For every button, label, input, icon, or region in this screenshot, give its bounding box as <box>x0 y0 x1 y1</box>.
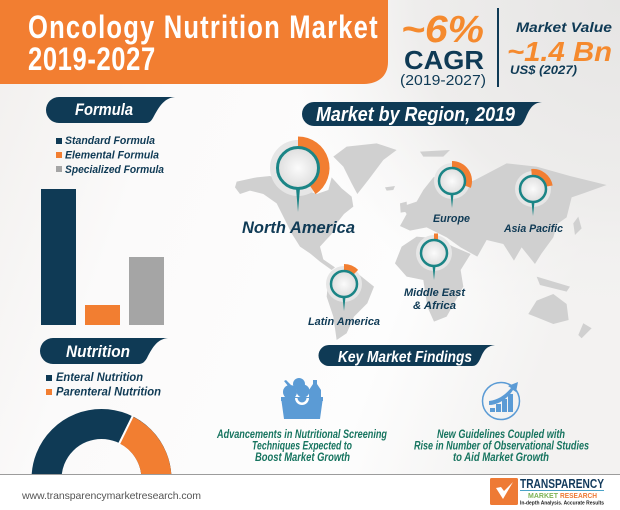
CAGR stat: CAGR <box>404 45 484 75</box>
label: latin america: Latin America <box>308 316 380 328</box>
bar chart <box>41 189 164 325</box>
label: middle east and africa: Middle East <box>404 287 466 299</box>
donut chart <box>32 409 172 474</box>
pin: north america <box>270 140 326 212</box>
heading: nutrition: Nutrition <box>66 342 130 361</box>
label: asia pacific: Asia Pacific <box>503 223 563 235</box>
legend: formula: Standard Formula <box>65 135 155 147</box>
market value stat: US$ (2027) <box>510 63 577 77</box>
finding text: guidelines <box>414 429 589 464</box>
pin: middle east and africa <box>416 234 452 280</box>
pin: europe <box>434 163 470 208</box>
label: middle east and africa <box>404 287 466 312</box>
heading: key market findings: Key Market Findings <box>338 349 472 366</box>
legend: formula <box>56 135 164 176</box>
panel: nutrition <box>32 338 172 474</box>
finding text: guidelines: New Guidelines Coupled with <box>437 429 565 441</box>
footer <box>0 474 620 510</box>
finding text: nutritional screening: Techniques Expected to <box>252 440 352 452</box>
legend: nutrition: Parenteral Nutrition <box>56 386 161 398</box>
heading: market by region: Market by Region, 2019 <box>316 104 516 126</box>
heading: formula: Formula <box>75 100 133 119</box>
CAGR stat <box>400 9 486 89</box>
logo: In-depth Analysis. Accurate Results <box>520 500 604 506</box>
title <box>28 10 378 78</box>
legend: nutrition <box>46 372 161 398</box>
heading: nutrition <box>40 338 168 364</box>
logo: MARKET <box>528 491 558 500</box>
label: north america: North America <box>242 218 355 237</box>
icon: food basket <box>281 378 323 419</box>
panel: formula <box>41 97 175 325</box>
pin: asia pacific <box>515 171 551 216</box>
finding text: guidelines: to Aid Market Growth <box>453 452 549 464</box>
header banner <box>0 0 388 84</box>
world map <box>235 143 607 340</box>
icon: growth chart <box>482 382 520 420</box>
panel: market by region <box>235 102 607 340</box>
pin: latin america <box>326 266 362 311</box>
legend: formula: Specialized Formula <box>65 164 164 176</box>
title: 2019-2027 <box>28 42 155 78</box>
label: middle east and africa: & Africa <box>413 300 456 312</box>
logo: RESEARCH <box>560 491 597 500</box>
finding text: nutritional screening: Boost Market Growth <box>255 452 350 464</box>
finding text: nutritional screening: Advancements in Nutritional Screening <box>216 429 387 441</box>
CAGR stat: (2019-2027) <box>400 73 486 89</box>
heading: formula <box>46 97 175 123</box>
title: Oncology Nutrition Market <box>28 10 378 46</box>
heading: key market findings <box>318 345 495 366</box>
market value stat: ~1.4 Bn <box>507 36 612 67</box>
label: europe: Europe <box>433 213 470 225</box>
logo <box>490 476 604 506</box>
CAGR stat: ~6% <box>401 9 484 51</box>
market value stat <box>507 19 612 77</box>
website url: www.transparencymarketresearch.com <box>21 490 201 502</box>
finding text: nutritional screening <box>216 429 387 464</box>
legend: nutrition: Enteral Nutrition <box>56 372 143 384</box>
legend: formula: Elemental Formula <box>65 150 159 162</box>
market value stat: Market Value <box>516 19 612 35</box>
panel: key market findings <box>216 345 589 464</box>
